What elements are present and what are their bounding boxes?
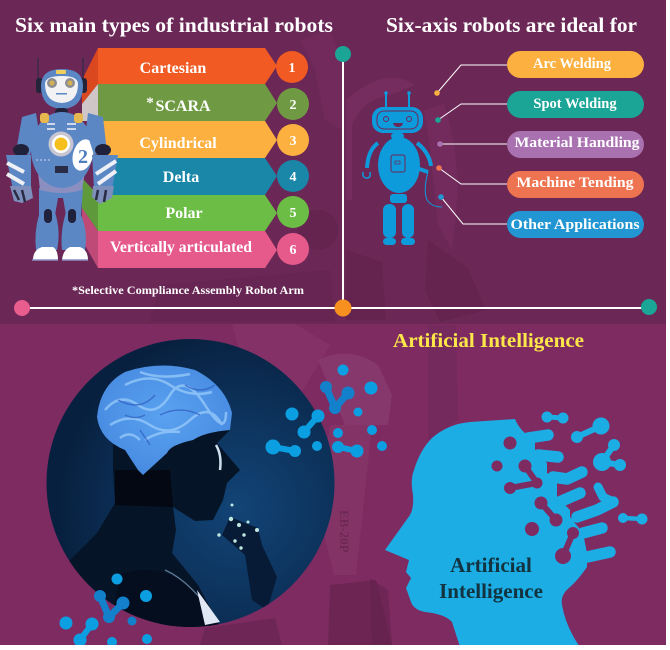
application: Material Handling: Material Handling [514,135,640,151]
application: Other Applications: Other Applications [510,217,640,233]
application: Machine Tending: Machine Tending [516,175,634,191]
type 2: SCARA: SCARA [155,98,211,115]
application: Spot Welding: Spot Welding [533,96,617,112]
type 1: Cartesian: 1 [288,61,296,76]
type 4: Delta: 4 [290,170,296,185]
type 4: Delta: Delta [163,169,199,186]
faint robot backdrop [150,30,486,645]
type 1: Cartesian [98,48,308,84]
illustration: blue humanoid robot: 2 [78,146,88,168]
type 6: Vertically articulated: 6 [290,243,296,258]
image: AI head with glowing brain [40,339,336,630]
molecule fragments around head [542,412,648,524]
application: Material Handling [437,131,644,158]
label: artificial intelligence: Artificial [450,553,532,577]
application: Arc Welding [434,51,644,96]
application: Machine Tending [436,165,644,198]
type 6: Vertically articulated [98,231,309,268]
type 2: SCARA: 2 [290,98,296,113]
application: Other Applications [438,194,644,238]
decoration: blue molecule dots [60,364,387,647]
type 5: Polar: 5 [290,206,296,221]
application: Arc Welding: Arc Welding [533,56,612,72]
footnote: Selective Compliance Assembly Robot Arm [78,283,304,297]
type 3: Cylindrical: 3 [290,134,296,149]
illustration: blue head silhouette [385,412,648,650]
type 3: Cylindrical: Cylindrical [139,135,217,152]
heading: artificial intelligence: Artificial Intelligence [393,330,584,352]
type 1: Cartesian: Cartesian [140,60,206,77]
type 3: Cylindrical [98,121,309,158]
type 6: Vertically articulated: Vertically articulated [110,239,252,256]
heading: six-axis robots: Six-axis robots are ideal for [386,13,637,37]
type 5: Polar: Polar [165,205,203,222]
illustration: blue humanoid robot [6,58,118,260]
label: artificial intelligence: Intelligence [439,579,543,603]
heading: six main types: Six main types of industrial robots [15,13,333,37]
footnote: * [72,283,78,297]
application: Spot Welding [435,91,644,123]
type 2: SCARA [98,84,309,121]
timeline with nodes [14,46,657,316]
type 4: Delta [98,158,309,195]
type 2: SCARA: * [146,95,154,111]
illustration: small blue robot [363,91,442,245]
faint robot backdrop: EB-20P [337,510,352,553]
type 5: Polar [98,195,309,231]
ribbon list: robot types [82,48,309,268]
